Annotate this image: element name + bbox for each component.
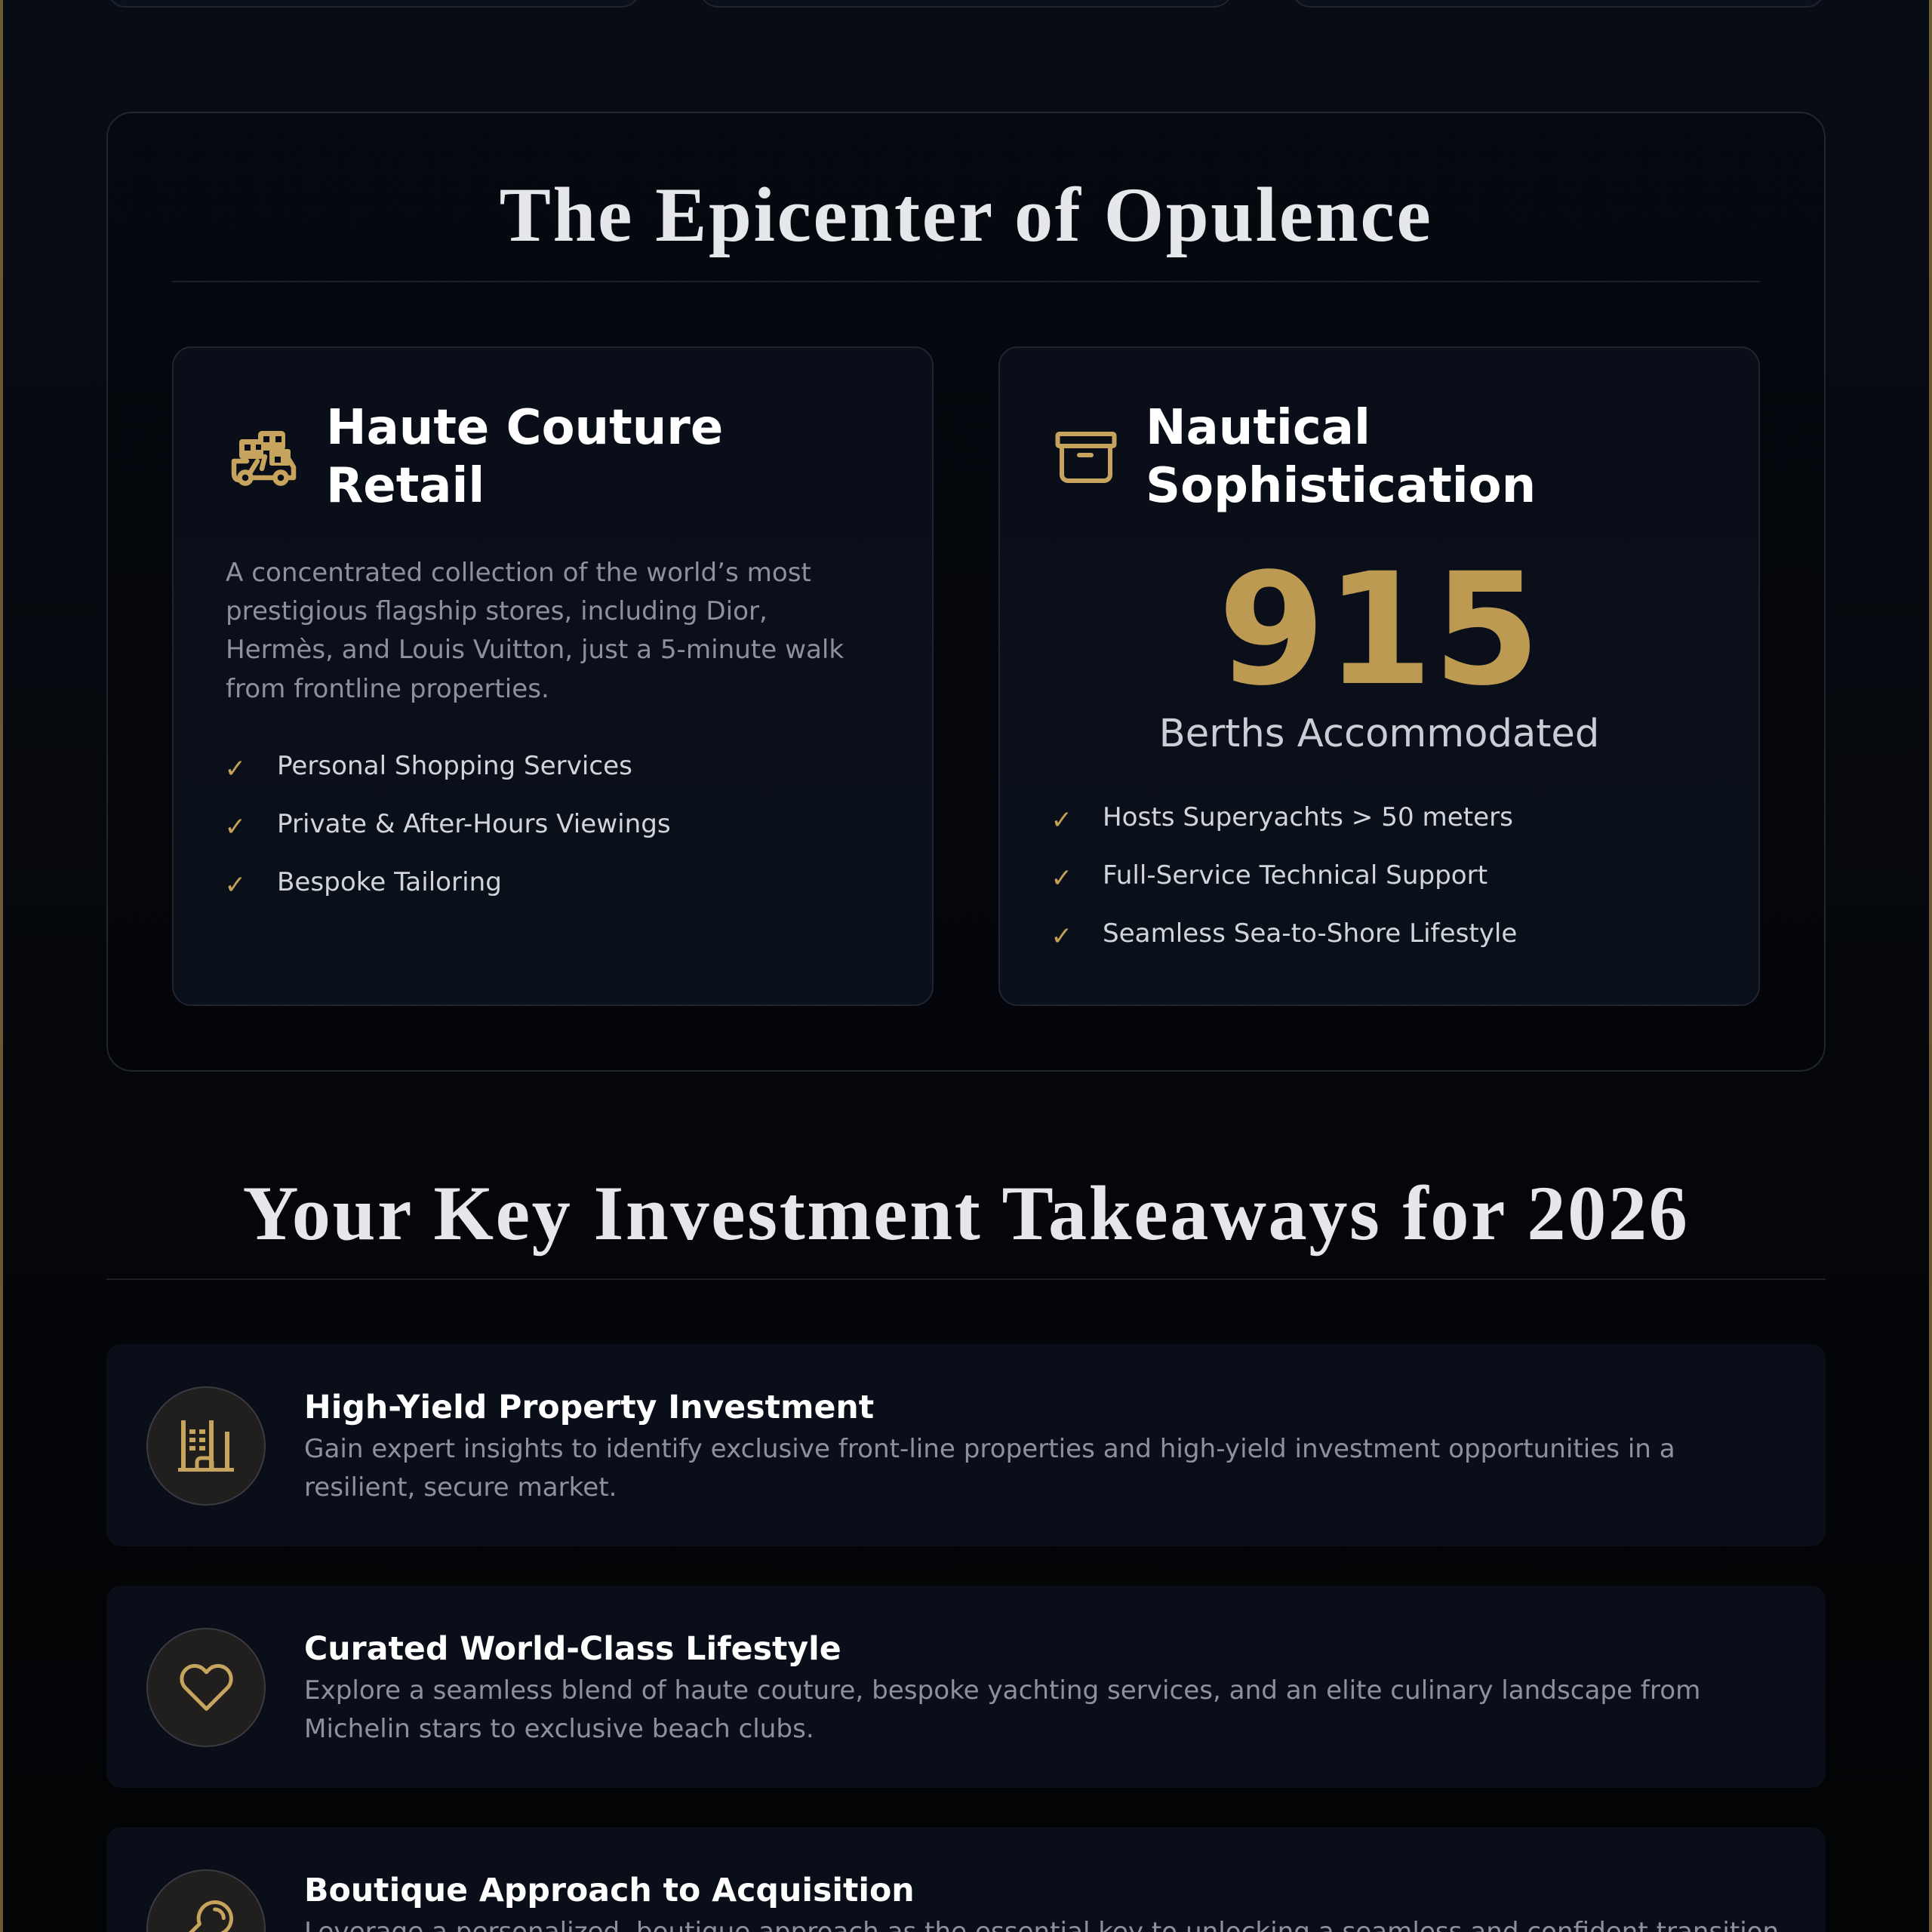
check list right: Hosts Superyachts > 50 meters bbox=[1103, 802, 1513, 832]
card title: nautical sophistication bbox=[1146, 400, 1536, 514]
card title: haute couture retail bbox=[326, 400, 723, 514]
card: nautical sophistication bbox=[998, 346, 1760, 1006]
card description bbox=[226, 558, 844, 704]
takeaway title 2: Curated World-Class Lifestyle bbox=[304, 1630, 841, 1668]
stat: 915 berths bbox=[1159, 540, 1599, 756]
top card fragment middle bbox=[699, 0, 1233, 8]
check list left: Bespoke Tailoring bbox=[277, 867, 502, 897]
takeaway text 2: Explore a seamless blend of haute couture, bespoke yachting services, and an elite culinary landscape from bbox=[304, 1675, 1700, 1706]
icon: archive box bbox=[1055, 432, 1117, 483]
stat: 915 berths: Berths Accommodated bbox=[1159, 711, 1599, 756]
icon circle: building bbox=[146, 1386, 266, 1506]
check list left bbox=[225, 751, 671, 900]
card: haute couture retail bbox=[172, 346, 934, 1006]
takeaway title 3: Boutique Approach to Acquisition bbox=[304, 1872, 915, 1909]
takeaway text 1: Gain expert insights to identify exclusive front-line properties and high-yield investment opportunities in a bbox=[304, 1434, 1675, 1464]
takeaway panel 1 bbox=[106, 1344, 1826, 1546]
card title: haute couture retail: Haute Couture bbox=[326, 400, 723, 456]
top card fragment left bbox=[106, 0, 641, 8]
stat: 915 berths: 915 bbox=[1218, 540, 1540, 720]
takeaway title 1: High-Yield Property Investment bbox=[304, 1389, 874, 1426]
check list left: ✓ bbox=[225, 754, 246, 784]
heading: the epicenter of opulence: The Epicenter of Opulence bbox=[500, 173, 1432, 258]
icon: boutique vehicle bbox=[231, 431, 296, 486]
check list right: ✓ bbox=[1051, 921, 1072, 952]
takeaway text 2: Michelin stars to exclusive beach clubs. bbox=[304, 1714, 814, 1744]
check list right: Full-Service Technical Support bbox=[1103, 860, 1487, 891]
takeaway panel 3 bbox=[106, 1827, 1826, 1932]
card description: prestigious flagship stores, including Dior, bbox=[226, 596, 768, 626]
icon: heart bbox=[180, 1663, 233, 1711]
check list left: ✓ bbox=[225, 812, 246, 842]
check list right: ✓ bbox=[1051, 863, 1072, 894]
icon circle: heart bbox=[146, 1628, 266, 1747]
divider under takeaways heading bbox=[106, 1278, 1826, 1280]
check list left: ✓ bbox=[225, 870, 246, 900]
icon circle: key bbox=[146, 1869, 266, 1932]
card title: haute couture retail: Retail bbox=[326, 458, 485, 514]
check list right: Seamless Sea-to-Shore Lifestyle bbox=[1103, 918, 1517, 949]
divider under heading bbox=[172, 281, 1760, 282]
card title: nautical sophistication: Sophistication bbox=[1146, 458, 1536, 514]
takeaway 3 clipped at page bottom bbox=[106, 1827, 1826, 1932]
top card fragment right bbox=[1291, 0, 1826, 8]
card description: from frontline properties. bbox=[226, 674, 549, 704]
gold right edge bbox=[1929, 0, 1932, 1932]
takeaway text 1 bbox=[304, 1434, 1675, 1503]
check list right: ✓ bbox=[1051, 805, 1072, 835]
card description: A concentrated collection of the world’s most bbox=[226, 558, 811, 588]
icon: building bbox=[178, 1420, 234, 1472]
check list left: Private & After-Hours Viewings bbox=[277, 809, 671, 839]
heading: key investment takeaways: Your Key Investment Takeaways for 2026 bbox=[243, 1171, 1689, 1257]
check list right bbox=[1051, 802, 1517, 952]
takeaway panel 2 bbox=[106, 1586, 1826, 1788]
panel: the epicenter of opulence bbox=[106, 112, 1826, 1072]
takeaway text 2 bbox=[304, 1675, 1700, 1744]
icon: key bbox=[189, 1900, 233, 1932]
check list left: Personal Shopping Services bbox=[277, 751, 632, 781]
gold left edge bbox=[0, 0, 3, 1932]
card title: nautical sophistication: Nautical bbox=[1146, 400, 1371, 456]
takeaway text 1: resilient, secure market. bbox=[304, 1472, 617, 1503]
card description: Hermès, and Louis Vuitton, just a 5-minute walk bbox=[226, 635, 844, 665]
